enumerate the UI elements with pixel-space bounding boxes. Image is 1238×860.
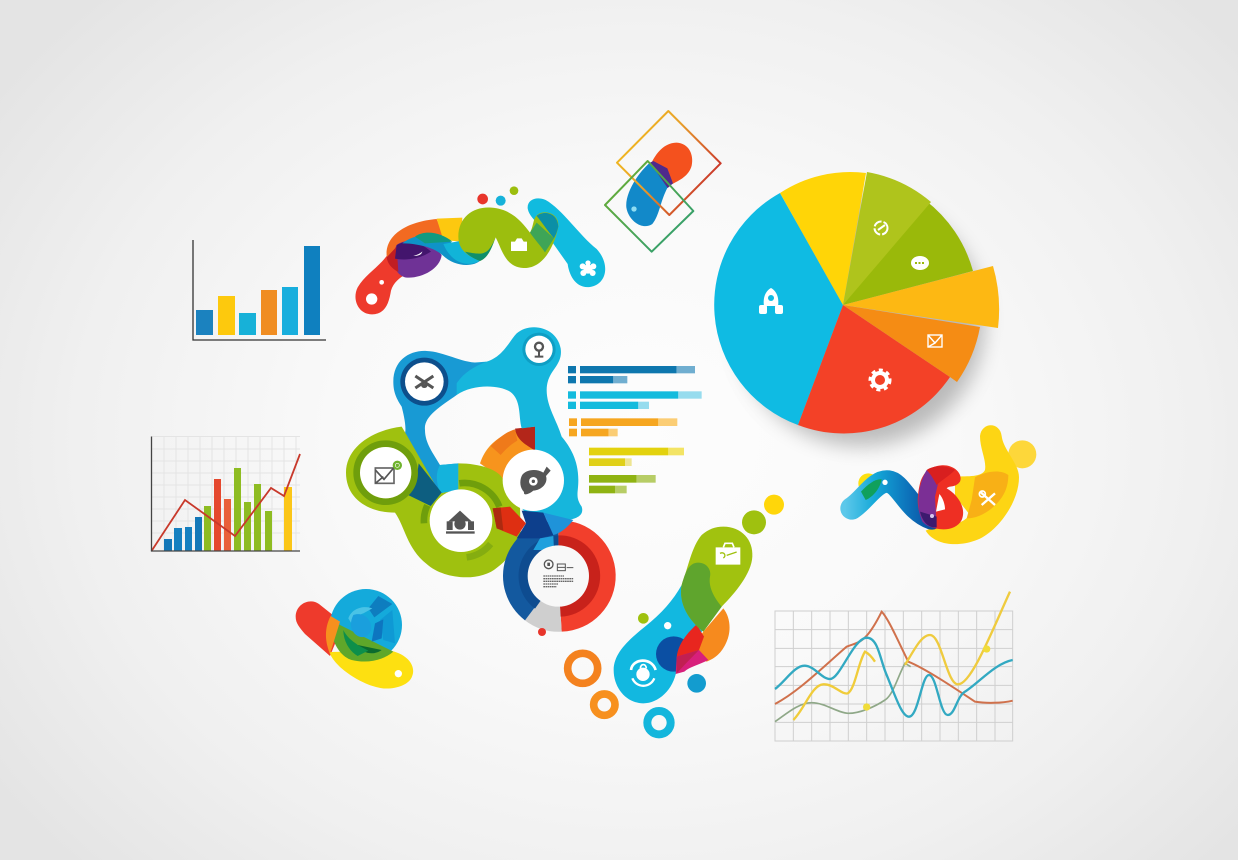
- overlap shards: [493, 507, 573, 550]
- orange segment: [387, 219, 445, 262]
- white dot: [395, 670, 402, 677]
- ring: cyan: [647, 711, 671, 734]
- network diagram: [346, 327, 702, 632]
- icon: briefcase: [716, 543, 740, 565]
- dark blue circle: [656, 636, 691, 672]
- slice: olive: [843, 172, 931, 305]
- yellow to red square: [617, 111, 721, 215]
- chart grid: [775, 611, 1013, 741]
- footprint shape: bottom centre: [568, 495, 784, 734]
- icon: rocket: [759, 288, 783, 314]
- blue ribbon: [852, 482, 932, 518]
- donut chart: [503, 520, 616, 632]
- yellow capsule: [329, 651, 413, 689]
- purple segment: [393, 241, 442, 278]
- diamond outlines with capsule: [605, 111, 721, 252]
- series: grey green: [775, 663, 911, 722]
- line chart: bottom right: [775, 592, 1013, 741]
- node: disc icon: [503, 450, 564, 511]
- slice: green: [843, 200, 973, 305]
- dots above ribbon: [477, 186, 518, 206]
- node: tool icon: [400, 358, 448, 406]
- icon: lock: [631, 661, 656, 686]
- icon: envelope: [928, 335, 942, 347]
- node: house icon: [430, 489, 492, 552]
- node: document icon: [528, 545, 589, 607]
- red loop: [918, 465, 963, 529]
- cyan segment: [528, 198, 605, 287]
- bar chart: top left: [193, 240, 326, 340]
- series: yellow left: [793, 652, 875, 720]
- dark green ring arcs: [357, 444, 499, 557]
- data points: [863, 645, 990, 711]
- yellow segment: [437, 218, 462, 242]
- series: orange red: [775, 612, 1013, 704]
- yellow circle: [1008, 440, 1036, 468]
- cyan network body: [447, 327, 582, 520]
- ring: orange large: [568, 653, 598, 683]
- slice: amber: [843, 266, 999, 328]
- red segment: [355, 252, 405, 314]
- slice: yellow: [780, 172, 866, 305]
- slice: red: [798, 305, 950, 433]
- small red dot under donut: [538, 628, 546, 636]
- snail shape: bottom left: [296, 589, 413, 689]
- cyan foot: [614, 585, 712, 703]
- ribbon: top centre: [355, 186, 605, 314]
- horizontal bar list: [568, 366, 702, 493]
- ring: orange small: [594, 694, 615, 715]
- series: blue: [775, 638, 1013, 717]
- icon: gear: [870, 370, 890, 390]
- combo chart: bars and red trend line: [152, 436, 300, 551]
- white dot: [664, 622, 671, 629]
- green network body: [346, 427, 521, 577]
- blue segment: [402, 235, 481, 265]
- circle: [326, 589, 402, 662]
- slice: orange: [843, 305, 980, 382]
- icon: speech bubble: [911, 256, 929, 270]
- icons on ribbon: [366, 238, 596, 305]
- series: yellow right: [905, 592, 1010, 684]
- capsule: [626, 143, 692, 226]
- green segment: [458, 207, 558, 268]
- red and magenta overlap: [676, 624, 708, 674]
- node: envelope icon: [360, 447, 411, 498]
- dots: [638, 495, 784, 693]
- pie chart: [714, 172, 999, 446]
- green capsule: [681, 527, 752, 632]
- icon: swirl: [874, 222, 888, 234]
- amber overlay with icon: [967, 471, 1008, 518]
- icon: tools: [979, 491, 995, 505]
- slice: cyan: [714, 193, 843, 425]
- dark teal wedge: [406, 463, 442, 506]
- orange toe: [688, 608, 730, 662]
- node: map pin icon: [522, 333, 556, 366]
- small yellow blob: [858, 473, 878, 493]
- ribbon: right: [852, 425, 1036, 544]
- pie shadow: [736, 198, 984, 446]
- red capsule: [296, 601, 343, 656]
- orange arc: [480, 427, 535, 480]
- yellow hook: [926, 425, 1019, 544]
- blue network body: [393, 351, 487, 493]
- green square: [605, 161, 693, 252]
